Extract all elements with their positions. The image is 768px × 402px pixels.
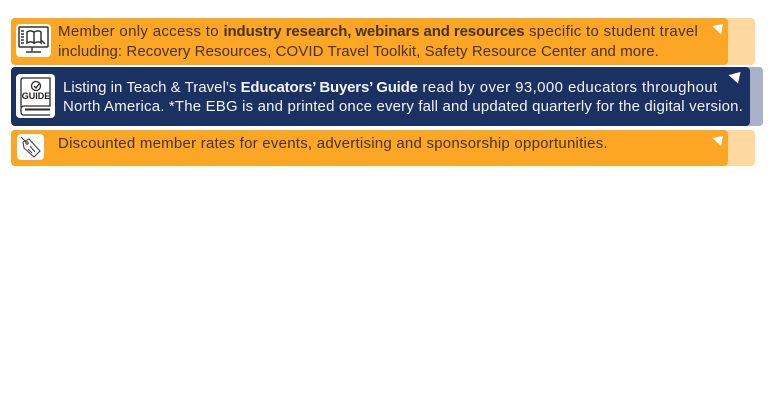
panel bar <box>11 67 750 126</box>
panel bar <box>11 18 728 65</box>
icon: corner arrow <box>712 24 723 34</box>
icon: price tag <box>17 134 44 160</box>
panel shadow tab <box>711 18 755 65</box>
icon: corner arrow <box>728 72 740 84</box>
panel shadow tab <box>721 67 763 126</box>
text: guide listing line 2: North America. *The EBG is and printed once every fall and updated quarterly for the digital version. <box>63 98 743 115</box>
icon: corner arrow <box>712 136 723 146</box>
panel: educators buyers guide <box>11 67 763 126</box>
panel: discounted rates <box>11 130 755 166</box>
icon: computer with book <box>16 24 51 57</box>
panel shadow tab <box>711 130 755 166</box>
panel bar <box>11 130 728 166</box>
panel: research access <box>11 18 755 65</box>
text: research access line 2: including: Recovery Resources, COVID Travel Toolkit, Safety Resource Center and more. <box>58 43 659 60</box>
text: discounted rates: Discounted member rates for events, advertising and sponsorship opportunities. <box>58 135 608 152</box>
text: research access line 1: Member only access to industry research, webinars and resources specific to student travel <box>58 23 698 40</box>
icon: guide book <box>16 74 55 118</box>
text: guide listing line 1: Listing in Teach & Travel’s Educators’ Buyers’ Guide read by over 93,000 educators throughout <box>63 78 718 96</box>
icon: guide book: GUIDE <box>22 91 50 101</box>
